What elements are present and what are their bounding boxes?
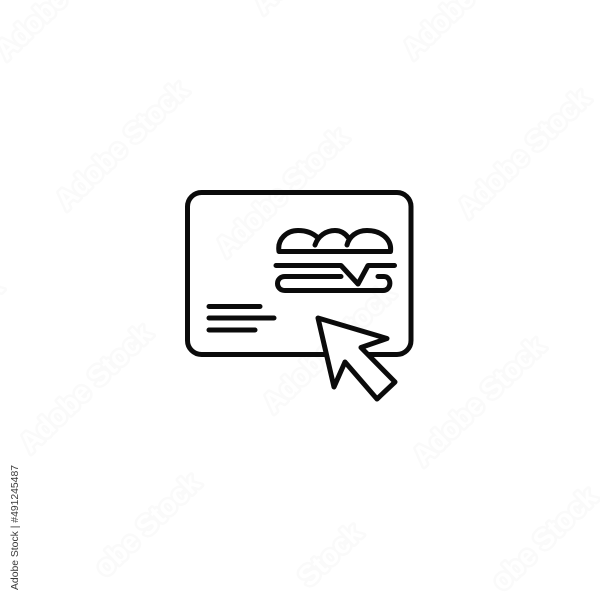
card outline xyxy=(188,192,411,354)
stock id caption: Adobe Stock | #491245487 xyxy=(9,465,21,590)
watermark pattern: Adobe Stock xyxy=(209,121,354,263)
watermark pattern: Adobe Stock xyxy=(451,82,596,224)
patty xyxy=(276,266,394,284)
bottom bun xyxy=(278,276,390,290)
icon: online food order card xyxy=(188,192,411,399)
watermark pattern: Stock xyxy=(292,517,368,592)
icon: burger xyxy=(276,230,394,290)
watermark pattern: Adobe Stock xyxy=(13,317,158,459)
watermark pattern: obe Stock xyxy=(485,481,600,596)
icon: cursor arrow xyxy=(318,318,395,399)
watermark pattern: Adobe Stock xyxy=(49,74,194,216)
text lines xyxy=(209,306,274,330)
watermark pattern: Adobe Stock xyxy=(406,330,551,472)
watermark pattern: Adobe Stock xyxy=(256,277,401,419)
top bun xyxy=(279,230,391,252)
watermark pattern: obe Stock xyxy=(88,467,206,582)
